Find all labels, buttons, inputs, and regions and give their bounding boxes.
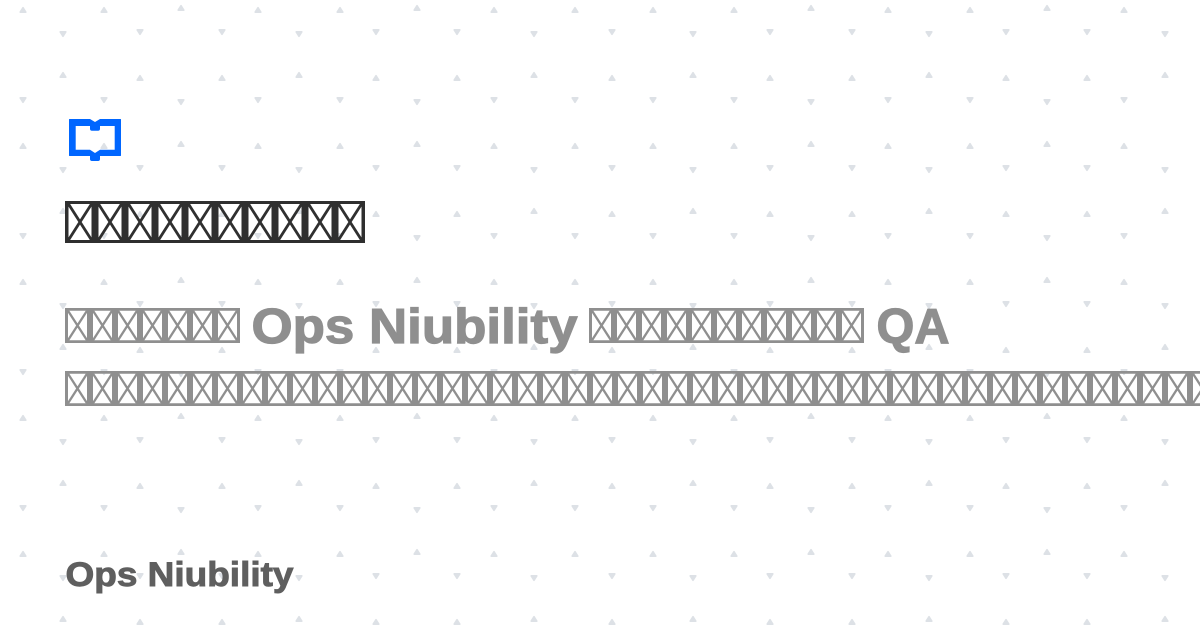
footer brand name: Ops Niubility (66, 556, 294, 594)
description line 1: mixed boxes and text: Ops Niubility (252, 300, 578, 354)
icon: open book logo (69, 119, 121, 161)
description line 1: mixed boxes and text (65, 300, 950, 354)
description line 1: mixed boxes and text: QA (876, 300, 950, 354)
description line 2: missing-glyph boxes (65, 371, 1200, 406)
title: missing-glyph boxes (65, 201, 365, 243)
